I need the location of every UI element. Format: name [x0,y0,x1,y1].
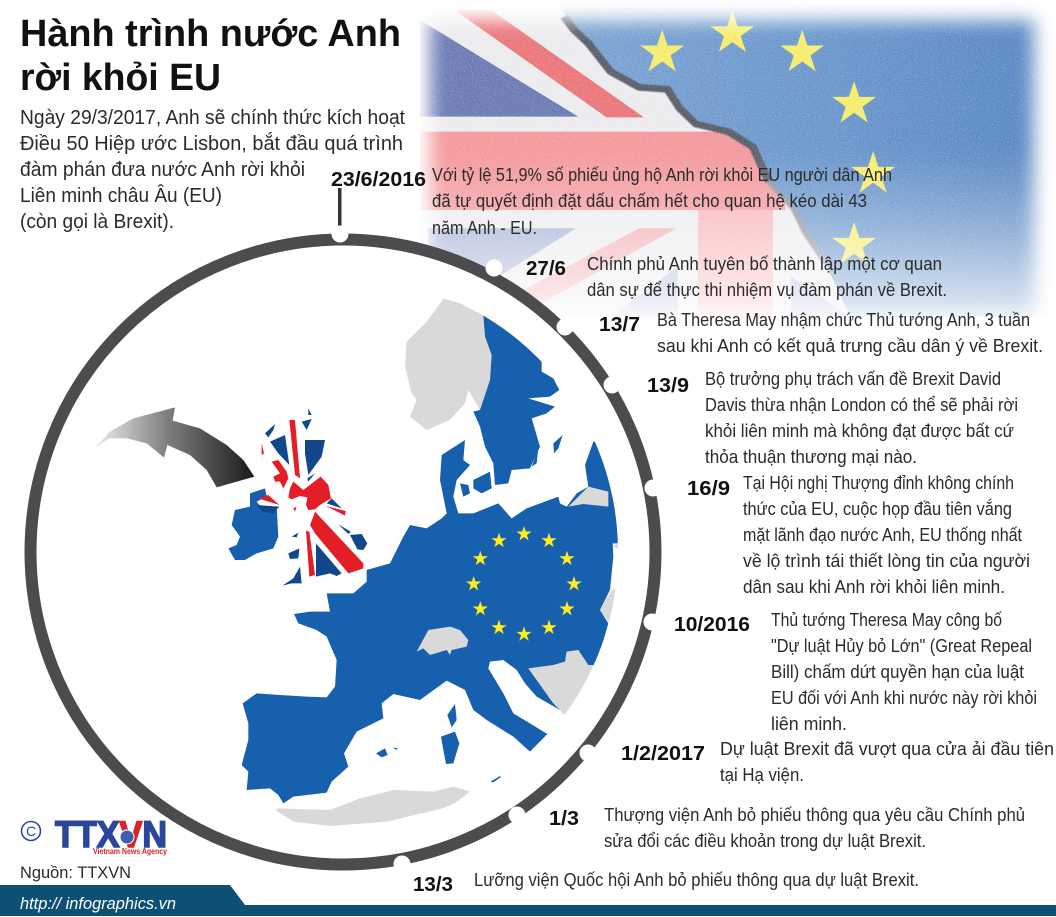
milestone: 1/3: 1/3 [549,808,579,830]
milestone: 23/6/2016: năm Anh - EU. [432,217,537,238]
source: Nguồn: TTXVN [20,863,131,882]
intro text block [20,107,405,233]
EU stars [466,526,582,641]
milestone: 10/2016: 10/2016 [674,614,750,636]
milestone: 16/9: Tại Hội nghị Thượng đỉnh không chính [743,472,1014,493]
milestone: 27/6: dân sự để thực thi nhiệm vụ đàm phán về Brexit. [587,279,947,300]
milestone: 10/2016: Thủ tướng Theresa May công bố [771,609,1002,630]
milestone: 13/7: sau khi Anh có kết quả trưng cầu dân ý về Brexit. [657,335,1043,356]
milestone: 27/6: 27/6 [526,258,566,280]
milestone: 23/6/2016: đã tự quyết định đặt dấu chấm hết cho quan hệ kéo dài 43 [432,190,867,211]
logo: TTXVN Vietnam News Agency: Vietnam News Agency [93,846,167,856]
intro text block: đàm phán đưa nước Anh rời khỏi [20,159,305,181]
milestone: 10/2016: liên minh. [771,713,847,734]
title [20,13,401,99]
milestone: 27/6: Chính phủ Anh tuyên bố thành lập một cơ quan [587,253,942,274]
timeline ring with nodes [30,188,662,872]
milestone: 13/9: khỏi liên minh mà không đạt được bất cứ [705,420,1014,441]
milestone: 1/3 [549,804,1025,851]
milestone: 1/2/2017: 1/2/2017 [621,743,705,765]
milestone: 16/9: về lộ trình tái thiết lòng tin của người [743,550,1030,571]
milestone: 16/9: 16/9 [687,478,730,500]
milestone: 16/9: mặt lãnh đạo nước Anh, EU thống nhất [743,524,1022,545]
EU blue land [242,316,618,804]
milestone: 13/7: 13/7 [599,314,640,336]
non-EU grey land [275,298,594,826]
map of Europe [242,298,653,826]
milestone: 13/3: Lưỡng viện Quốc hội Anh bỏ phiếu thông qua dự luật Brexit. [474,869,919,890]
milestone: 16/9: dân sau khi Anh rời khỏi liên minh. [743,576,1005,597]
intro text block: (còn gọi là Brexit). [20,211,174,233]
logo: TTXVN Vietnam News Agency: TTXVN [55,814,167,855]
milestone: 13/3: 13/3 [413,874,453,896]
UK in Union Jack colours and Ireland [95,407,367,586]
milestone: 23/6/2016 [331,164,892,238]
milestone: 1/3: sửa đổi các điều khoản trong dự luật Brexit. [604,830,926,851]
milestone: 1/2/2017 [621,738,1054,785]
milestone: 27/6 [526,253,947,300]
milestone: 16/9 [687,472,1030,597]
milestone: 10/2016 [674,609,1037,734]
milestone: 13/9: 13/9 [647,375,689,397]
milestone: 10/2016: Bill) chấm dứt quyền hạn của luật [771,661,1024,682]
grey enclaves [417,487,620,655]
milestone: 23/6/2016: 23/6/2016 [331,169,426,191]
title: Hành trình nước Anh [20,13,401,55]
milestone: 13/7 [599,309,1043,356]
milestone: 13/3 [413,869,919,896]
logo: TTXVN Vietnam News Agency: C [26,823,36,839]
milestone: 1/2/2017: tại Hạ viện. [720,764,804,785]
background image: torn UK and EU flags [420,0,1056,317]
milestone: 13/9: Bộ trưởng phụ trách vấn đề Brexit David [705,368,1001,389]
milestone: 16/9: thức của EU, cuộc họp đầu tiên vắng [743,498,1012,519]
intro text block: Liên minh châu Âu (EU) [20,184,222,207]
intro text block: Ngày 29/3/2017, Anh sẽ chính thức kích hoạt [20,107,405,129]
milestone: 13/9 [647,368,1018,467]
milestone: 13/9: thỏa thuận thương mại nào. [705,446,917,467]
arrow: leaving the EU [95,407,254,487]
intro text block: Điều 50 Hiệp ước Lisbon, bắt đầu quá trình [20,132,403,155]
footer url: http:// infographics.vn [20,894,176,913]
footer bar [0,885,1056,916]
title: rời khỏi EU [20,57,221,99]
milestone: 23/6/2016: Với tỷ lệ 51,9% số phiếu ủng hộ Anh rời khỏi EU người dân Anh [432,164,892,185]
milestone: 13/9: Davis thừa nhận London có thể sẽ phải rời [705,394,1018,415]
